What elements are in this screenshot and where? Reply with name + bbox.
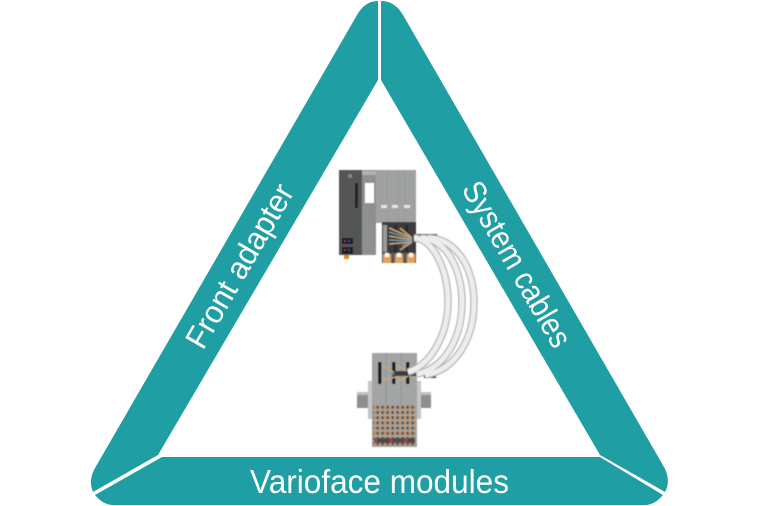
- terminal module: [357, 353, 431, 447]
- controller module: [339, 170, 416, 259]
- panel: varioface modules side: [95, 457, 663, 505]
- label: Varioface modules: Varioface modules: [250, 463, 509, 500]
- label: Front adapter: Front adapter: [178, 177, 301, 354]
- front adapter: [382, 222, 416, 263]
- right triangle bar: [381, 1, 668, 492]
- system cables: [408, 234, 474, 378]
- left triangle bar: [91, 1, 378, 492]
- bottom triangle bar: [95, 457, 663, 505]
- illustration: controller and terminal modules: [339, 170, 474, 447]
- label: System cables: System cables: [455, 174, 579, 354]
